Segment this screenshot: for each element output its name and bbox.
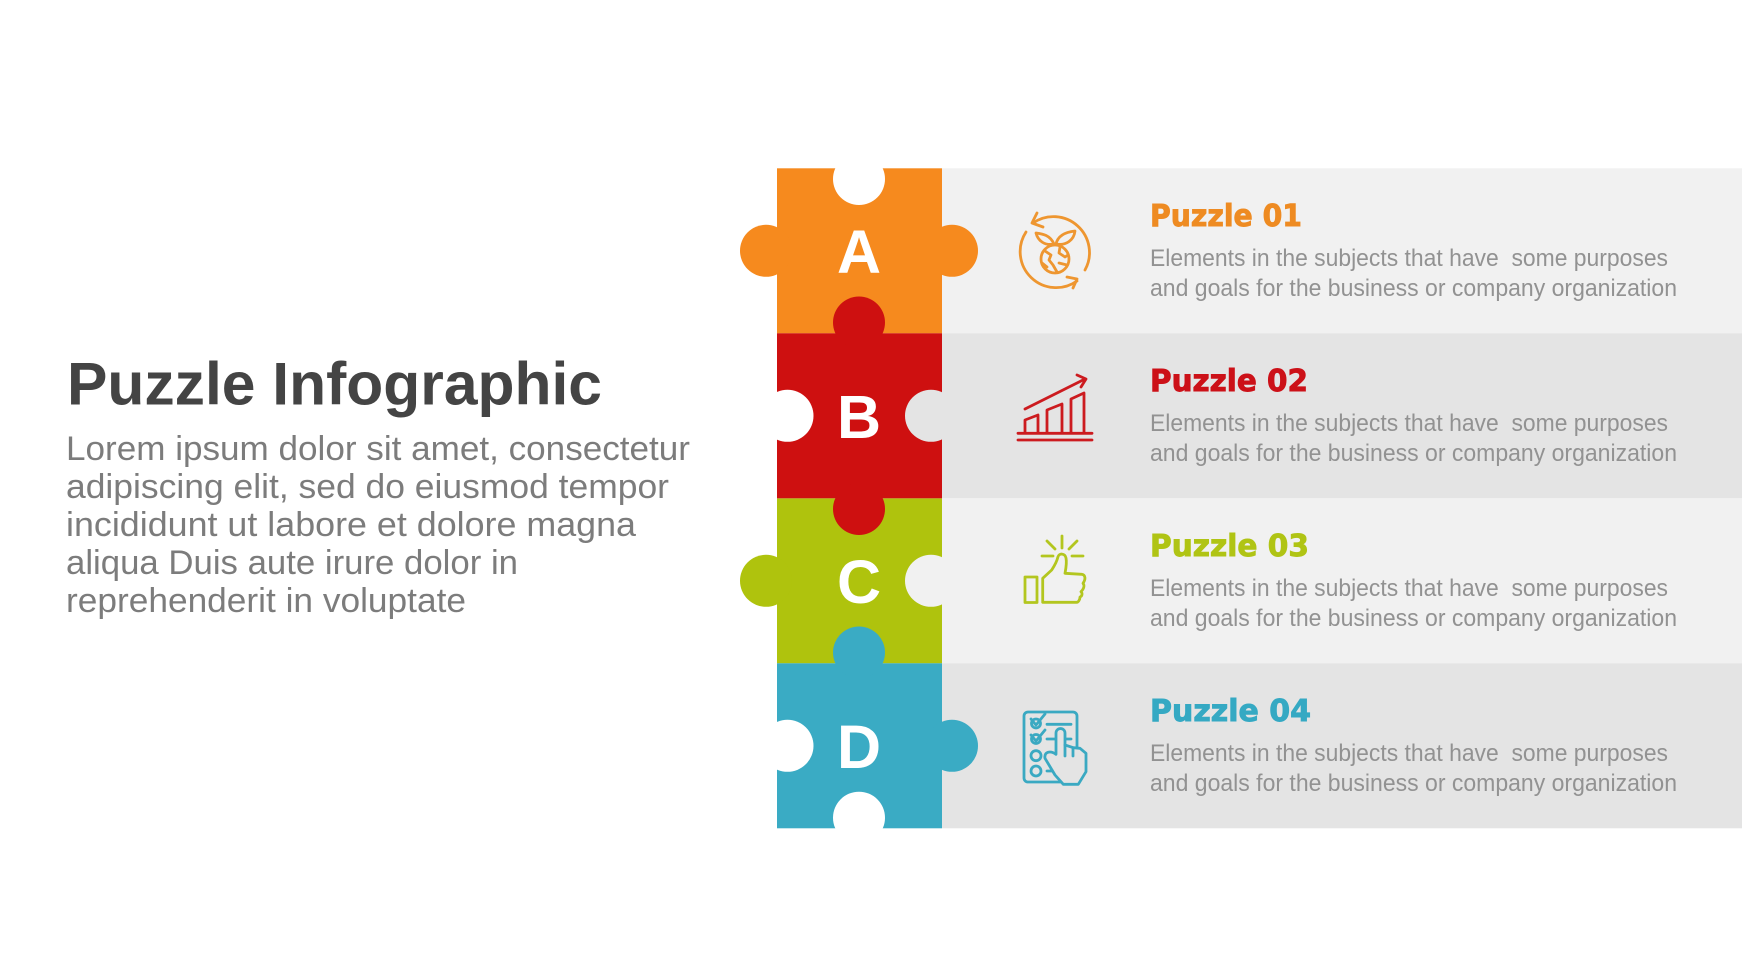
text block: description 01: and goals for the business or company organization (1150, 275, 1677, 302)
puzzle piece D (762, 626, 978, 844)
icon: checklist with pointing hand (1024, 712, 1086, 784)
text block: description 03: and goals for the business or company organization (1150, 605, 1677, 632)
panel: row 04 (942, 663, 1742, 828)
icon: thumbs up (1025, 536, 1085, 602)
text block: description 02: Elements in the subjects that have some purposes (1150, 410, 1668, 437)
text block: intro paragraph: incididunt ut labore et dolore magna (66, 506, 636, 544)
puzzle piece B (762, 296, 957, 535)
puzzle piece A (740, 153, 978, 333)
text block: description 02: and goals for the business or company organization (1150, 440, 1677, 467)
puzzle piece C (740, 498, 957, 663)
text block: intro paragraph: Lorem ipsum dolor sit amet, consectetur (66, 430, 690, 468)
text block: description 03: Elements in the subjects that have some purposes (1150, 575, 1668, 602)
text block: description 04: and goals for the business or company organization (1150, 770, 1677, 797)
heading: main title: Puzzle Infographic (67, 350, 602, 418)
text block: description 02 (1150, 410, 1677, 467)
text block: description 04 (1150, 740, 1677, 797)
text block: intro paragraph: adipiscing elit, sed do eiusmod tempor (66, 468, 669, 506)
panel: row 03 (942, 498, 1742, 663)
puzzle piece A: A (837, 218, 881, 286)
text block: description 01 (1150, 245, 1677, 302)
text block: description 03 (1150, 575, 1677, 632)
puzzle piece C: C (837, 548, 881, 616)
panel: row 02 (942, 333, 1742, 498)
text block: intro paragraph: reprehenderit in voluptate (66, 582, 466, 620)
heading: Puzzle 01: Puzzle 01 (1150, 199, 1302, 234)
puzzle piece B: B (837, 383, 881, 451)
text block: intro paragraph (66, 430, 690, 620)
heading: Puzzle 04: Puzzle 04 (1150, 694, 1311, 729)
heading: Puzzle 03: Puzzle 03 (1150, 529, 1309, 564)
text block: intro paragraph: aliqua Duis aute irure dolor in (66, 544, 518, 582)
icon: rising bar chart (1018, 375, 1092, 440)
text block: description 01: Elements in the subjects that have some purposes (1150, 245, 1668, 272)
text block: description 04: Elements in the subjects that have some purposes (1150, 740, 1668, 767)
panel: row 01 (942, 168, 1742, 333)
puzzle piece D: D (837, 713, 881, 781)
heading: Puzzle 02: Puzzle 02 (1150, 364, 1308, 399)
icon: globe with plant and cycle arrows (1020, 213, 1089, 288)
